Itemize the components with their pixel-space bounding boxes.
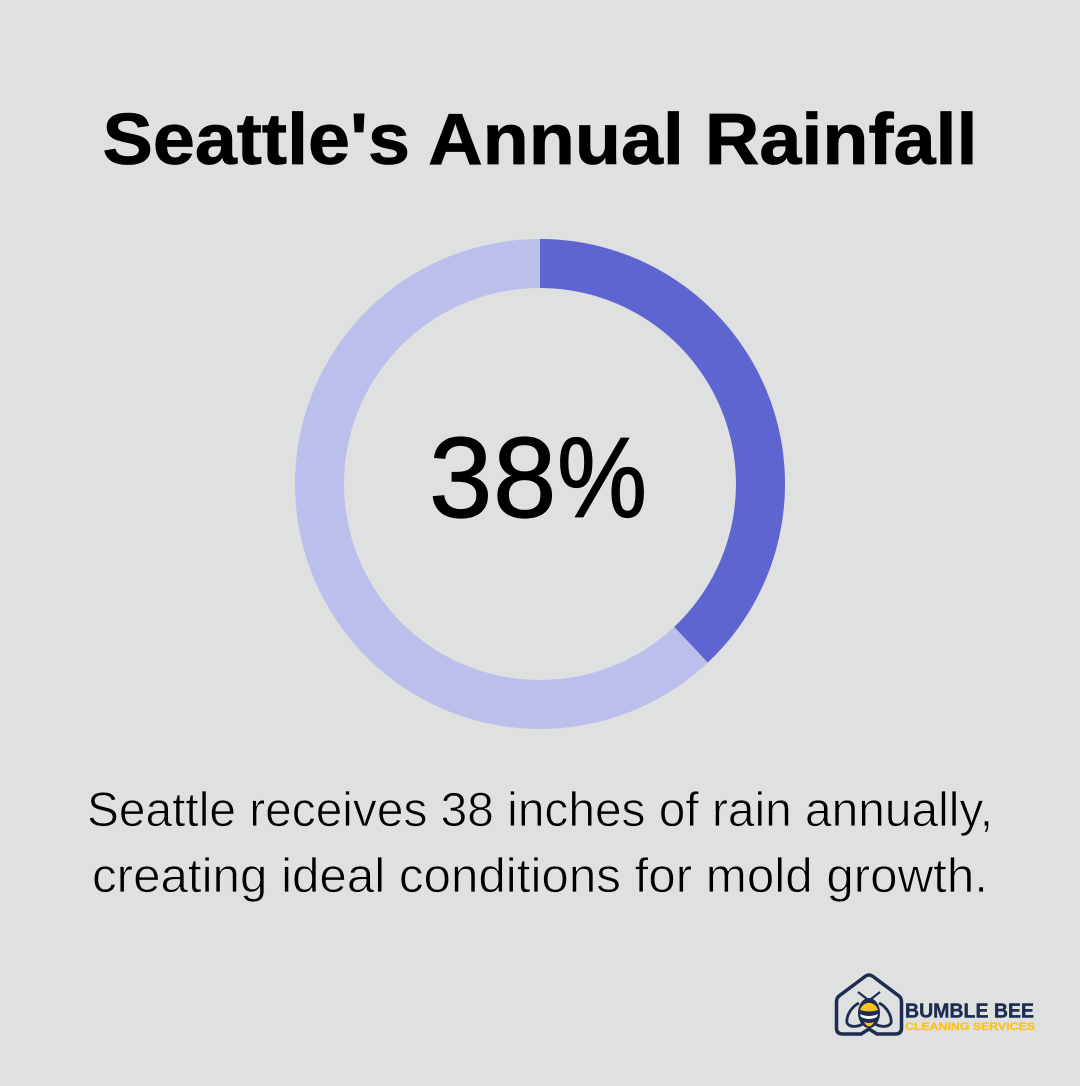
donut chart: 38% — [320, 264, 761, 704]
description text: Seattle receives 38 inches of rain annually, — [87, 784, 993, 837]
logo: Bumble Bee Cleaning Services — [836, 975, 1035, 1034]
logo tagline: CLEANING SERVICES — [905, 1021, 1035, 1033]
icon: house with bee — [836, 975, 902, 1034]
description text: creating ideal conditions for mold growth. — [92, 850, 988, 903]
description text — [87, 784, 993, 903]
center percentage: % — [557, 415, 647, 542]
center percentage: 38 — [429, 415, 556, 542]
logo wordmark: BUMBLE BEE — [905, 1000, 1034, 1022]
title: Seattle's Annual Rainfall — [102, 100, 978, 180]
